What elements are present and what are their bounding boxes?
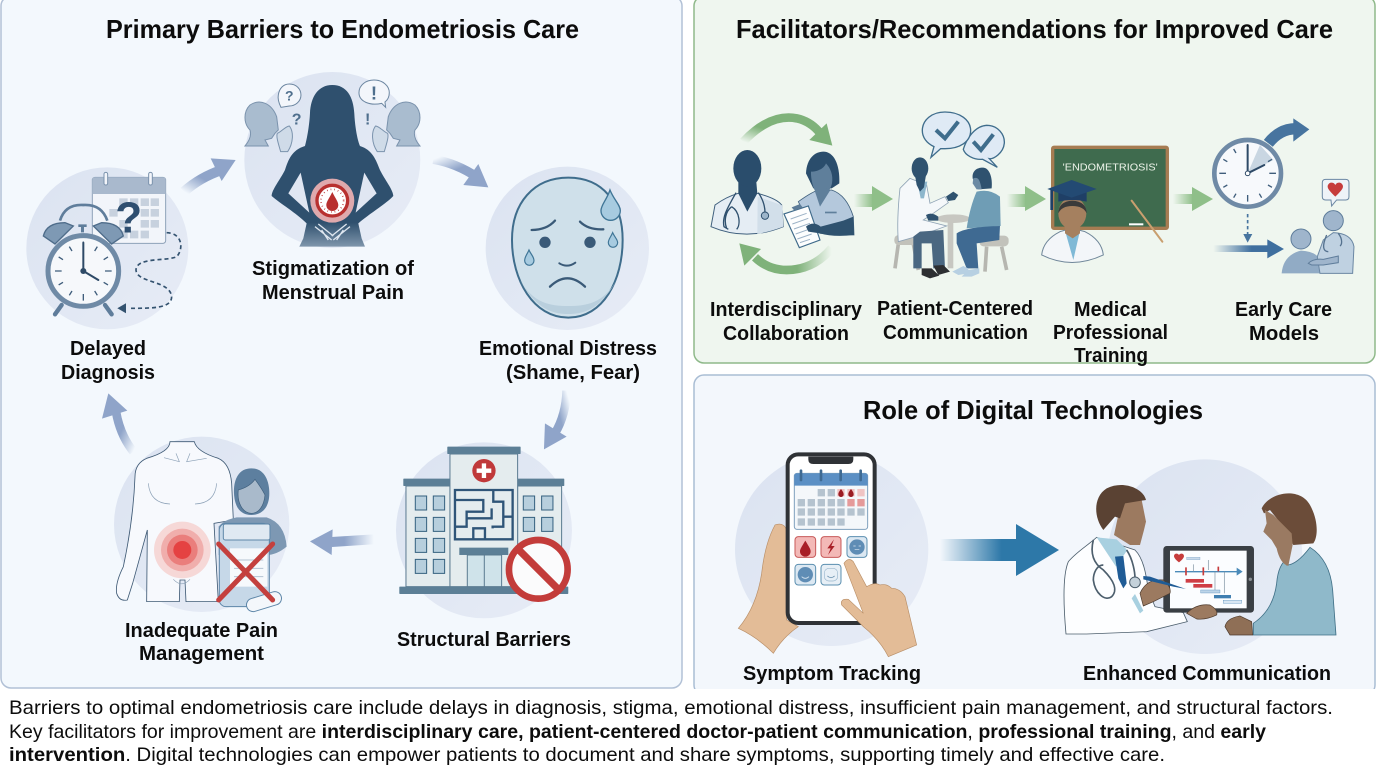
label: emotional distress: Emotional Distress [479,337,657,360]
summary text block: Key facilitators for improvement are interdisciplinary care, patient-centered doctor-patient communication, professional training, and early [9,721,1266,743]
arrow: distress to structural [544,391,567,449]
label: early care models: Early Care [1235,298,1332,321]
label: stigmatization: Menstrual Pain [262,281,404,304]
summary text block [0,689,1376,768]
icon: enhanced communication [1064,459,1336,654]
label: early care models: Models [1249,322,1319,345]
label: emotional distress: (Shame, Fear) [506,361,640,384]
arrow: delayed to stigmatization [184,158,236,192]
label: patient-centered communication: Patient-Centered [877,297,1033,320]
icon: stigmatization of menstrual pain: ? [292,111,302,128]
icon: stigmatization of menstrual pain: ! [371,82,377,103]
heading: digital technologies: Role of Digital Technologies [863,395,1203,425]
label: symptom tracking: Symptom Tracking [743,662,921,685]
label: delayed diagnosis: Diagnosis [61,361,155,384]
icon: symptom tracking phone [735,453,928,657]
label: inadequate pain management: Management [139,642,264,665]
label: stigmatization [252,257,414,304]
label: stigmatization: Stigmatization of [252,257,414,280]
icon: inadequate pain management [114,437,289,613]
label: interdisciplinary collaboration [710,298,863,345]
arrow: tracking to communication [940,524,1059,576]
icon: early care models [1213,118,1354,273]
arrows: green process arrows [854,186,1213,211]
arrow: pain to delayed [102,393,133,452]
panel: primary barriers [1,0,682,688]
label: delayed diagnosis: Delayed [70,337,146,360]
label: medical professional training: Medical [1074,298,1147,321]
summary text block: Barriers to optimal endometriosis care include delays in diagnosis, stigma, emotional distress, insufficient pain management, and structural factors. [9,697,1333,719]
icon: stigmatization of menstrual pain: ? [285,88,294,104]
label: delayed diagnosis [61,337,155,384]
label: early care models [1235,298,1332,345]
arrow: structural to pain [310,529,374,555]
label: interdisciplinary collaboration: Interdisciplinary [710,298,863,321]
icon: structural barriers hospital [396,442,572,618]
panel: digital technologies [694,375,1375,695]
icon: medical professional training: 'ENDOMETRIOSIS' [1063,163,1158,174]
label: enhanced communication: Enhanced Communication [1083,662,1331,685]
icon: stigmatization of menstrual pain [244,72,420,248]
label: inadequate pain management: Inadequate Pain [125,619,278,642]
heading: primary barriers: Primary Barriers to Endometriosis Care [106,14,579,44]
label: emotional distress [479,337,657,384]
label: inadequate pain management [125,619,278,665]
icon: medical professional training [1042,147,1167,262]
icon: delayed diagnosis [26,167,188,329]
heading: facilitators: Facilitators/Recommendations for Improved Care [736,14,1333,44]
icon: interdisciplinary collaboration [711,118,854,270]
label: medical professional training [1053,298,1168,367]
label: interdisciplinary collaboration: Collaboration [723,322,849,345]
label: patient-centered communication: Communication [883,321,1028,344]
icon: patient-centered communication [894,112,1009,278]
arrow: stigmatization to distress [433,159,488,187]
panel: facilitators [694,0,1375,367]
icon: emotional distress face [486,167,649,330]
label: patient-centered communication [877,297,1033,344]
icon: delayed diagnosis: ? [115,193,142,242]
label: medical professional training: Professional [1053,321,1168,344]
summary text block: intervention. Digital technologies can empower patients to document and share symptoms, supporting timely and effective care. [9,744,1165,766]
label: medical professional training: Training [1074,344,1148,367]
label: structural barriers: Structural Barriers [397,628,571,651]
icon: stigmatization of menstrual pain: ! [365,111,370,128]
